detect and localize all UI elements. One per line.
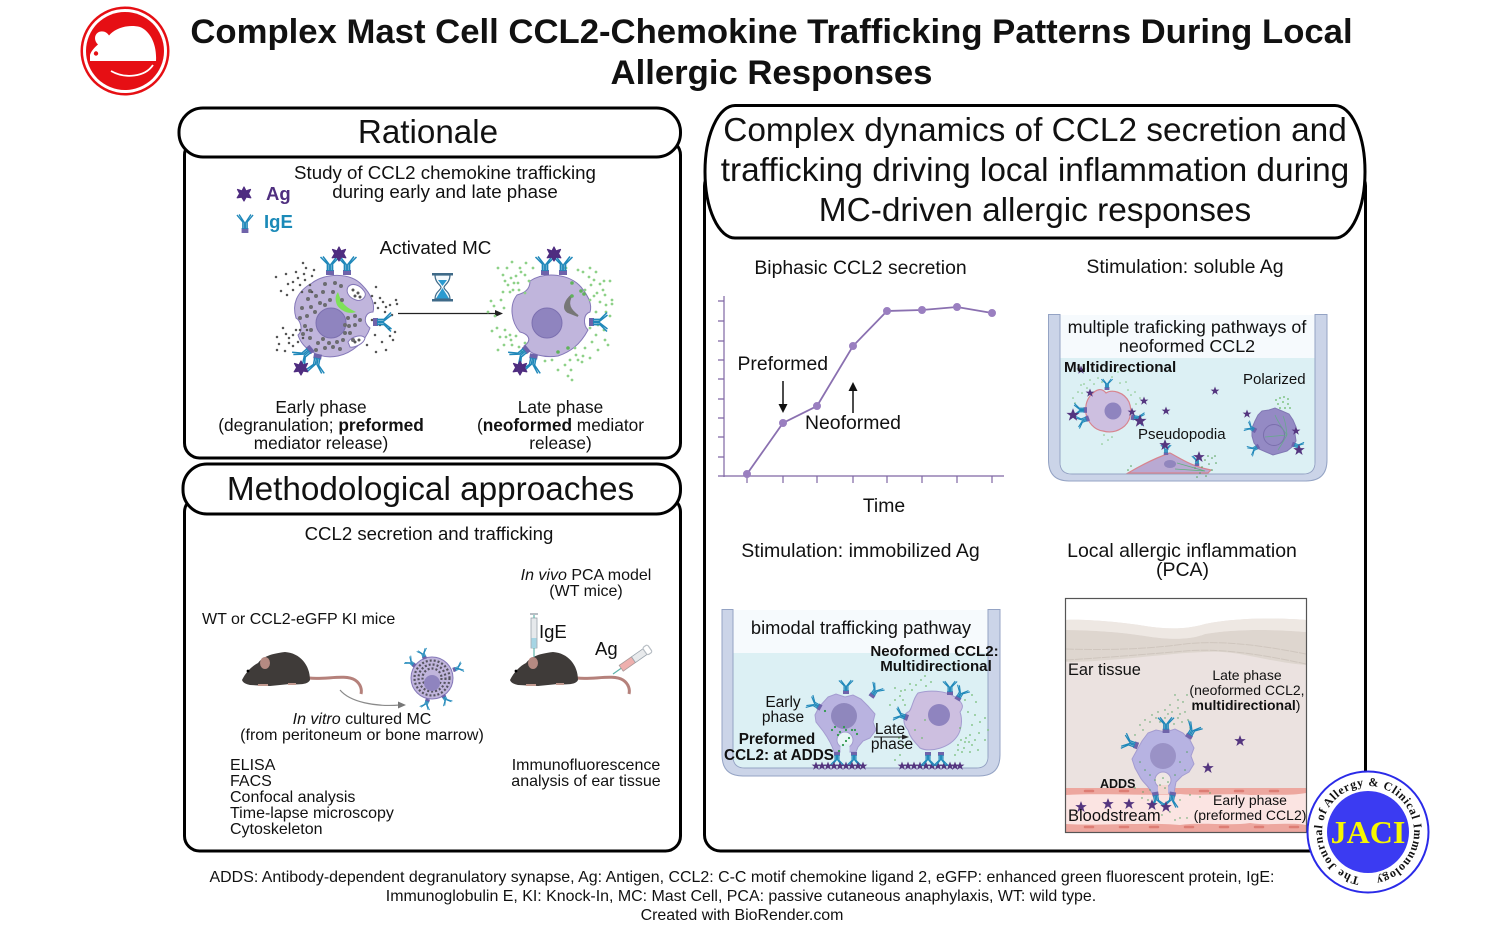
text: early phase caption: Early phase xyxy=(275,397,367,417)
text: early phase label: (preformed CCL2) xyxy=(1194,807,1306,823)
label: late phase xyxy=(871,721,913,753)
heading: rationale xyxy=(179,108,680,157)
text: in vitro caption: (from peritoneum or bone marrow) xyxy=(240,727,484,744)
title: Allergic Responses xyxy=(611,54,932,92)
text: immunofluorescence: analysis of ear tissue xyxy=(511,773,661,790)
text: late phase label: (neoformed CCL2, xyxy=(1189,682,1305,698)
label: preformed at ADDS: Preformed xyxy=(739,731,815,748)
text: in vivo model: In vivo PCA model xyxy=(521,567,651,584)
arrow: early to late phase xyxy=(874,734,909,740)
label: neoformed multidirectional: Multidirectional xyxy=(880,658,992,675)
heading: local allergic inflammation: Local allergic inflammation xyxy=(1067,540,1297,562)
text: in vivo model: (WT mice) xyxy=(549,583,623,600)
cell: pseudopodia xyxy=(1128,439,1216,477)
text: well title: multiple traficking pathways of xyxy=(1068,317,1306,337)
footer: abbreviations: Immunoglobulin E, KI: Knock-In, MC: Mast Cell, PCA: passive cutaneous anaphylaxis, WT: wild type. xyxy=(386,888,1096,905)
icon: mouse for in vitro xyxy=(242,652,361,694)
panel: methodological approaches xyxy=(183,464,680,851)
text: in vivo model xyxy=(521,567,651,600)
text: late phase caption: release) xyxy=(529,433,592,453)
text: late phase caption xyxy=(477,397,644,453)
heading: soluble Ag: Stimulation: soluble Ag xyxy=(1086,256,1284,278)
panel: immobilized Ag well xyxy=(722,610,1000,776)
label: ear tissue: Ear tissue xyxy=(1068,661,1141,679)
label: IgE injection: IgE xyxy=(539,621,567,642)
label: late phase: phase xyxy=(871,736,913,753)
text: analysis methods list: FACS xyxy=(230,773,272,790)
text: early phase label: Early phase xyxy=(1213,792,1287,808)
free antigen stars xyxy=(1075,735,1246,812)
text: study aim xyxy=(294,162,596,202)
panel: soluble Ag well xyxy=(1048,314,1327,481)
label: early phase xyxy=(762,694,804,726)
label: late phase: Late xyxy=(875,721,905,738)
footer: abbreviations: Created with BioRender.com xyxy=(641,907,843,924)
heading: biphasic: Biphasic CCL2 secretion xyxy=(754,257,967,279)
label: polarized: Polarized xyxy=(1243,371,1306,388)
footer: abbreviations: ADDS: Antibody-dependent degranulatory synapse, Ag: Antigen, CCL2: C-C motif chemokine ligand 2, eGFP: enhanced green fluorescent protein, IgE: xyxy=(210,869,1274,886)
text: late phase caption: (neoformed mediator xyxy=(477,415,644,435)
text: well title xyxy=(1068,317,1306,356)
cell: early phase mast cell xyxy=(276,247,397,375)
chart: biphasic CCL2 secretion line chart xyxy=(718,296,1004,517)
label: activated MC: Activated MC xyxy=(380,237,491,258)
text: analysis methods list: Confocal analysis xyxy=(230,789,355,806)
text: mice label: WT or CCL2-eGFP KI mice xyxy=(202,611,395,628)
logo: JACI journal seal: The Journal of Allergy & Clinical Immunology xyxy=(1314,778,1422,885)
text: late phase caption: Late phase xyxy=(518,397,603,417)
icon: mouse with injections xyxy=(510,613,652,694)
text: well title: neoformed CCL2 xyxy=(1119,336,1255,356)
panel: rationale xyxy=(179,108,680,458)
cell: early phase on surface xyxy=(805,680,885,766)
logo: JACI journal seal: JACI xyxy=(1331,814,1405,850)
arrow: mouse to cultured cell xyxy=(340,690,406,708)
text: well title: bimodal trafficking pathway xyxy=(751,617,972,638)
heading: local allergic inflammation: (PCA) xyxy=(1156,559,1209,581)
text: early phase label xyxy=(1194,792,1306,823)
text: study aim: during early and late phase xyxy=(332,181,558,202)
text: study aim: Study of CCL2 chemokine trafficking xyxy=(294,162,596,183)
free antigen stars xyxy=(1162,386,1219,415)
text: early phase caption: mediator release) xyxy=(254,433,388,453)
panel: complex dynamics xyxy=(704,106,1366,851)
chart: biphasic CCL2 secretion line chart: Preformed xyxy=(738,353,828,375)
label: neoformed multidirectional: Neoformed CCL2: xyxy=(870,643,999,660)
text: late phase label: Late phase xyxy=(1212,667,1282,683)
footer: abbreviations xyxy=(210,869,1274,924)
heading: complex dynamics: trafficking driving local inflammation during xyxy=(721,152,1349,189)
title: Complex Mast Cell CCL2-Chemokine Trafficking Patterns During Local xyxy=(190,13,1353,51)
legend: antigen and IgE xyxy=(237,183,293,233)
title xyxy=(190,13,1353,92)
panel: PCA ear tissue xyxy=(1066,598,1306,832)
legend: antigen and IgE: Ag xyxy=(266,183,291,204)
text: analysis methods list: Time-lapse microscopy xyxy=(230,805,394,822)
icon: hourglass xyxy=(432,273,453,302)
text: in vitro caption: In vitro cultured MC xyxy=(293,711,431,728)
heading: complex dynamics: MC-driven allergic responses xyxy=(819,192,1251,229)
label: antigen injection: Ag xyxy=(595,638,618,659)
logo: mouse emblem xyxy=(80,6,170,96)
arrow: early to late xyxy=(398,310,503,317)
label: preformed at ADDS xyxy=(724,731,834,764)
label: ADDS: ADDS xyxy=(1100,777,1135,791)
label: early phase: Early xyxy=(765,694,801,711)
text: analysis methods list: ELISA xyxy=(230,757,276,774)
cell: late phase mast cell xyxy=(488,247,612,380)
chart: biphasic CCL2 secretion line chart: Neoformed xyxy=(805,412,901,434)
text: early phase caption: (degranulation; preformed xyxy=(218,415,424,435)
heading: rationale: Rationale xyxy=(358,114,498,151)
heading: methodological approaches: Methodological approaches xyxy=(227,471,634,508)
text: late phase label: multidirectional) xyxy=(1192,697,1300,713)
text: subheading: CCL2 secretion and trafficking xyxy=(305,523,553,544)
cell: PCA mast cell xyxy=(1120,695,1210,820)
cell: polarized xyxy=(1243,397,1305,456)
legend: antigen and IgE: IgE xyxy=(264,211,293,232)
heading: immobilized Ag: Stimulation: immobilized Ag xyxy=(741,540,980,562)
label: multidirectional: Multidirectional xyxy=(1064,359,1176,376)
label: neoformed multidirectional xyxy=(870,643,999,675)
chart: biphasic CCL2 secretion line chart: Time xyxy=(863,495,905,517)
label: bloodstream: Bloodstream xyxy=(1068,807,1161,825)
heading: complex dynamics: Complex dynamics of CCL2 secretion and xyxy=(723,112,1347,149)
cell: late phase on surface xyxy=(890,676,988,766)
text: analysis methods list: Cytoskeleton xyxy=(230,821,322,838)
heading: methodological approaches xyxy=(183,464,680,514)
heading: complex dynamics xyxy=(705,106,1365,238)
label: preformed at ADDS: CCL2: at ADDS xyxy=(724,747,834,764)
label: pseudopodia: Pseudopodia xyxy=(1138,426,1226,443)
text: in vitro caption xyxy=(240,711,484,744)
label: early phase: phase xyxy=(762,709,804,726)
text: immunofluorescence: Immunofluorescence xyxy=(512,757,660,774)
text: analysis methods list xyxy=(230,757,394,838)
text: late phase label xyxy=(1189,667,1305,713)
immobilized antigen stars xyxy=(812,762,964,770)
heading: local allergic inflammation xyxy=(1067,540,1297,581)
cell: cultured mast cell xyxy=(404,648,464,710)
text: immunofluorescence xyxy=(511,757,661,790)
cell: multidirectional xyxy=(1066,366,1148,444)
text: early phase caption xyxy=(218,397,424,453)
